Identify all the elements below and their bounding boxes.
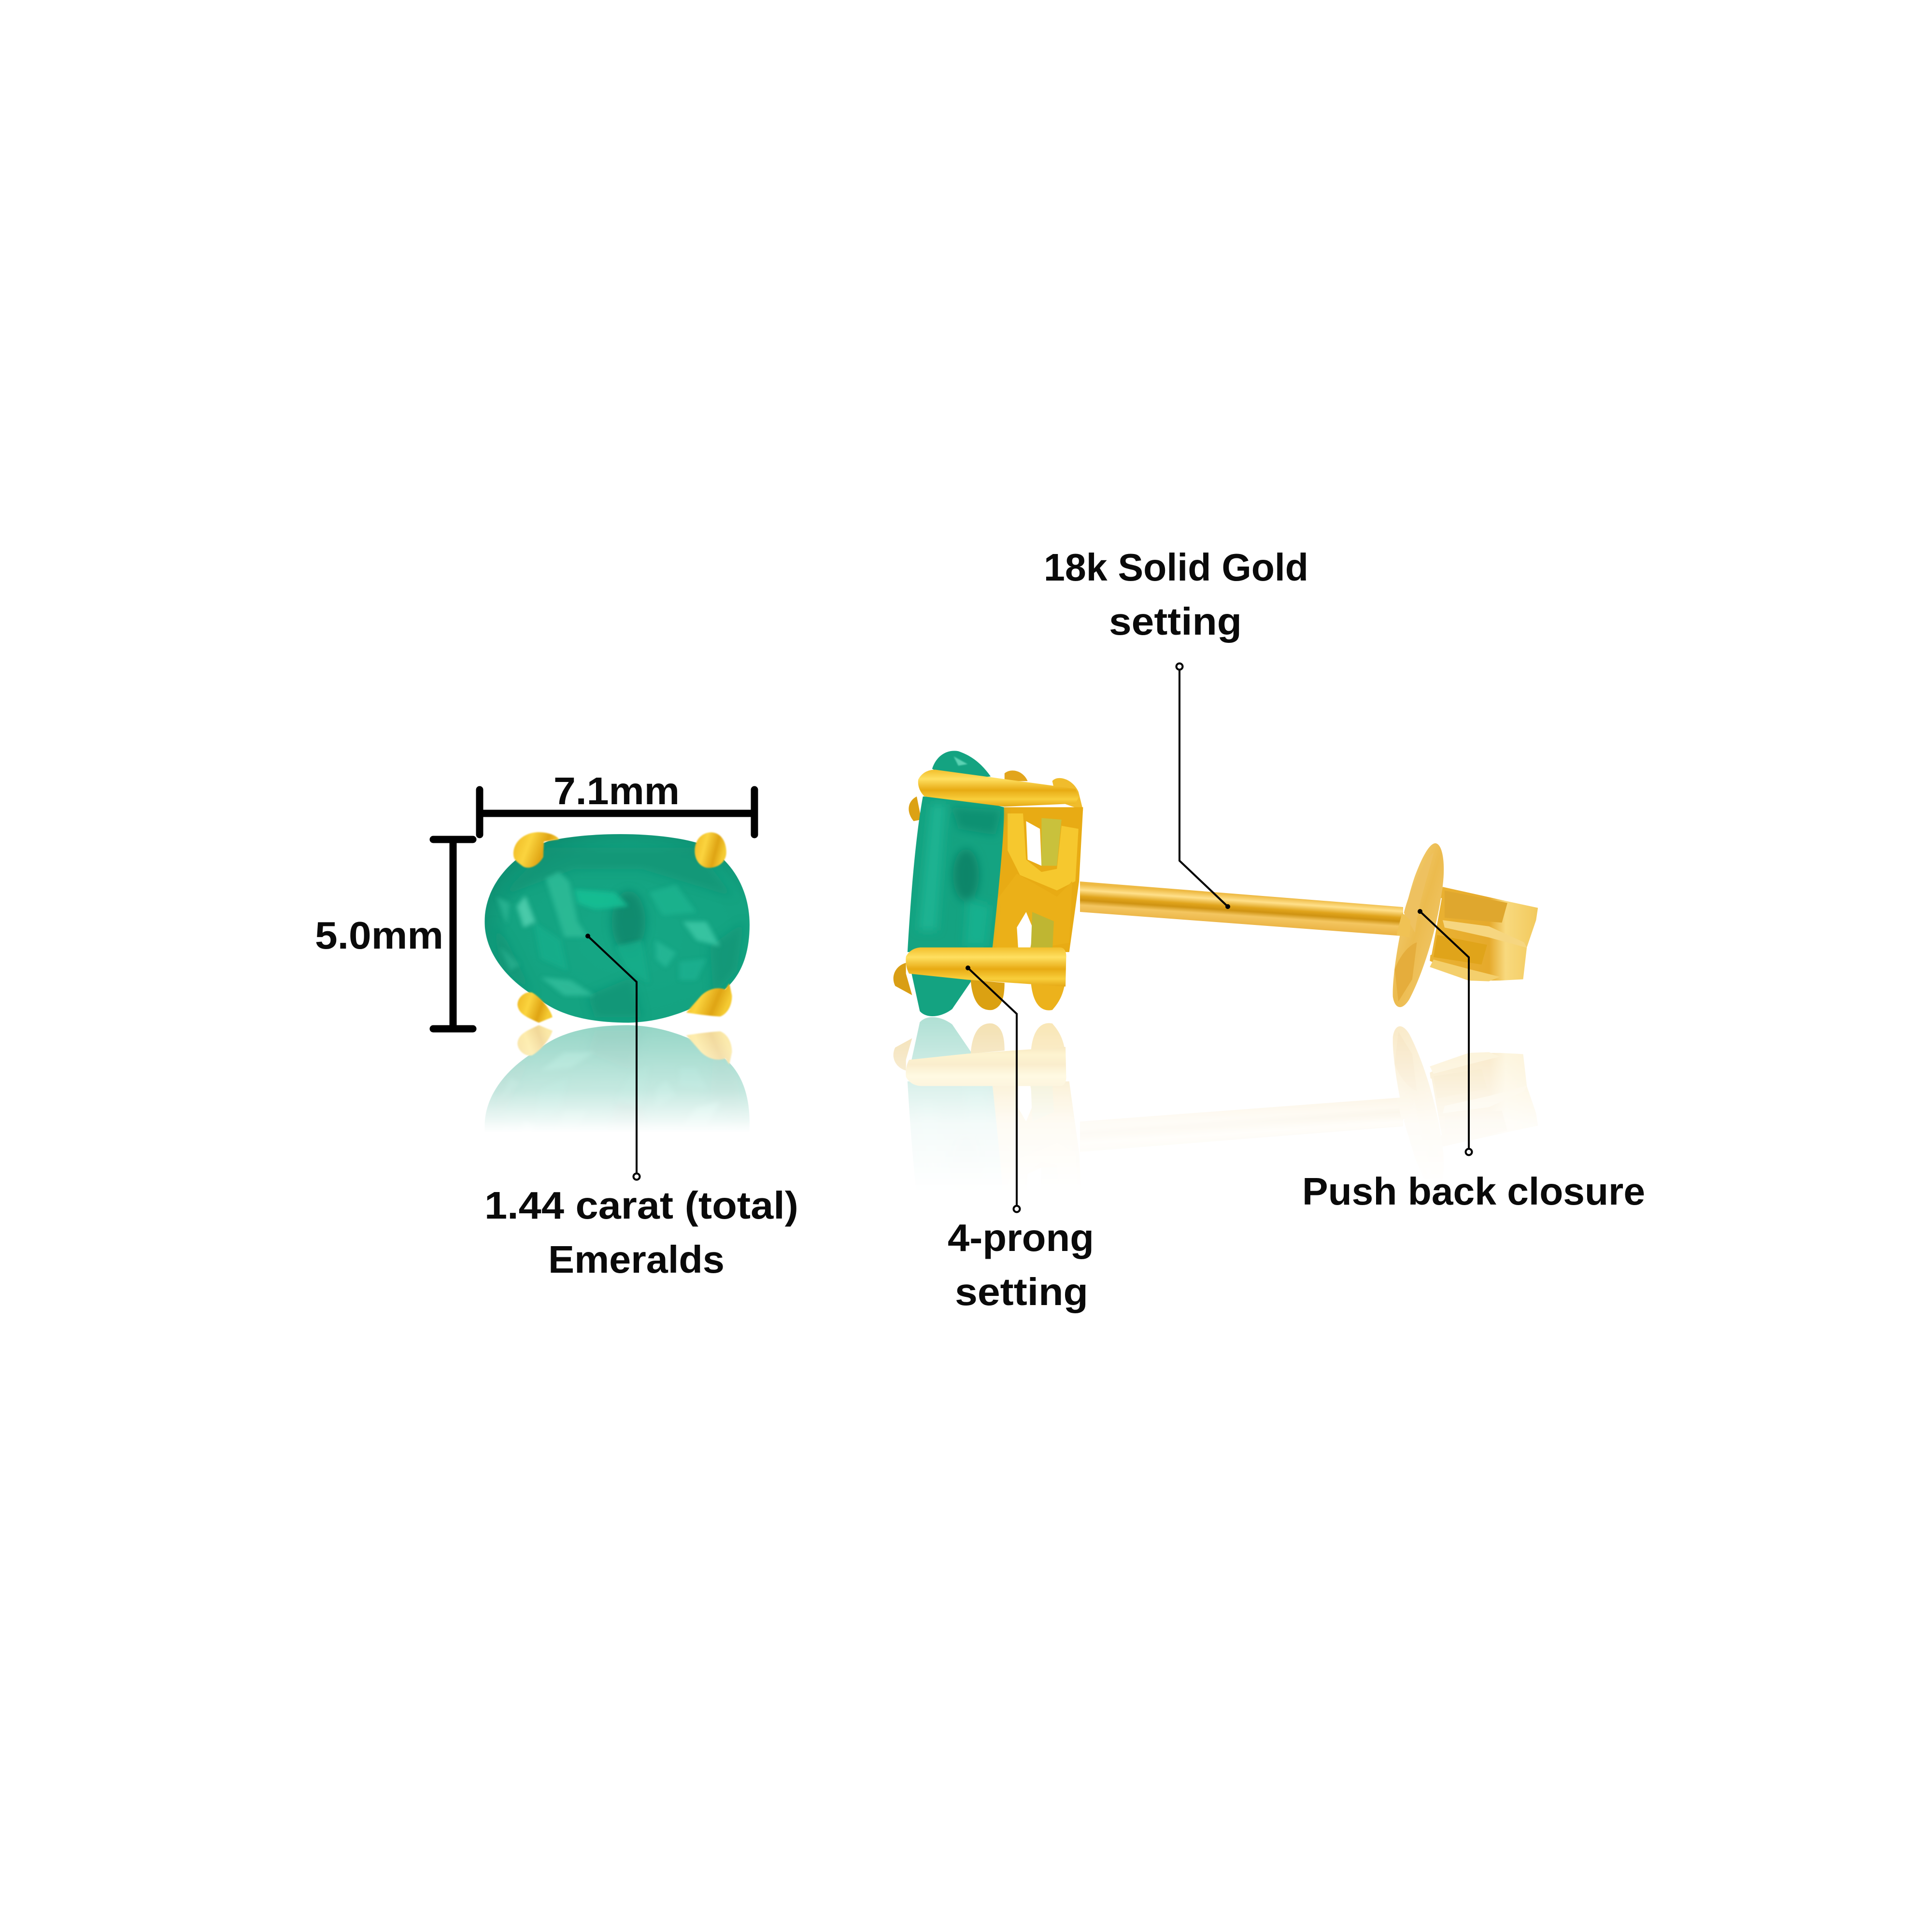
callout: emerald carat: 1.44 carat (total): [484, 1184, 798, 1227]
side view stud: [894, 751, 1538, 1016]
callout: 4-prong setting: [948, 966, 1094, 1313]
callout: emerald carat: [484, 934, 798, 1281]
callout: 18k solid gold setting: setting: [1109, 600, 1242, 643]
callout: 4-prong setting: 4-prong: [948, 1216, 1094, 1259]
callout: emerald carat: Emeralds: [548, 1238, 724, 1281]
emerald reflection: [485, 1024, 750, 1127]
callout: 18k solid gold setting: 18k Solid Gold: [1044, 546, 1308, 589]
side view reflection: [894, 1017, 1537, 1146]
callout: push back closure: [1302, 909, 1645, 1213]
callout: push back closure: Push back closure: [1302, 1170, 1645, 1213]
dimension: width 7.1mm: 7.1mm: [554, 769, 680, 812]
emerald front: [484, 832, 750, 1023]
callout: 18k solid gold setting: [1044, 546, 1308, 909]
earring: side view with post and push back: [894, 751, 1538, 1146]
dimension: height 5.0mm: [315, 839, 473, 1029]
callout: 4-prong setting: setting: [955, 1270, 1088, 1313]
earring: front view with emerald: [485, 831, 750, 1127]
dimension: height 5.0mm: 5.0mm: [315, 914, 443, 957]
dimension: width 7.1mm: [480, 769, 754, 835]
